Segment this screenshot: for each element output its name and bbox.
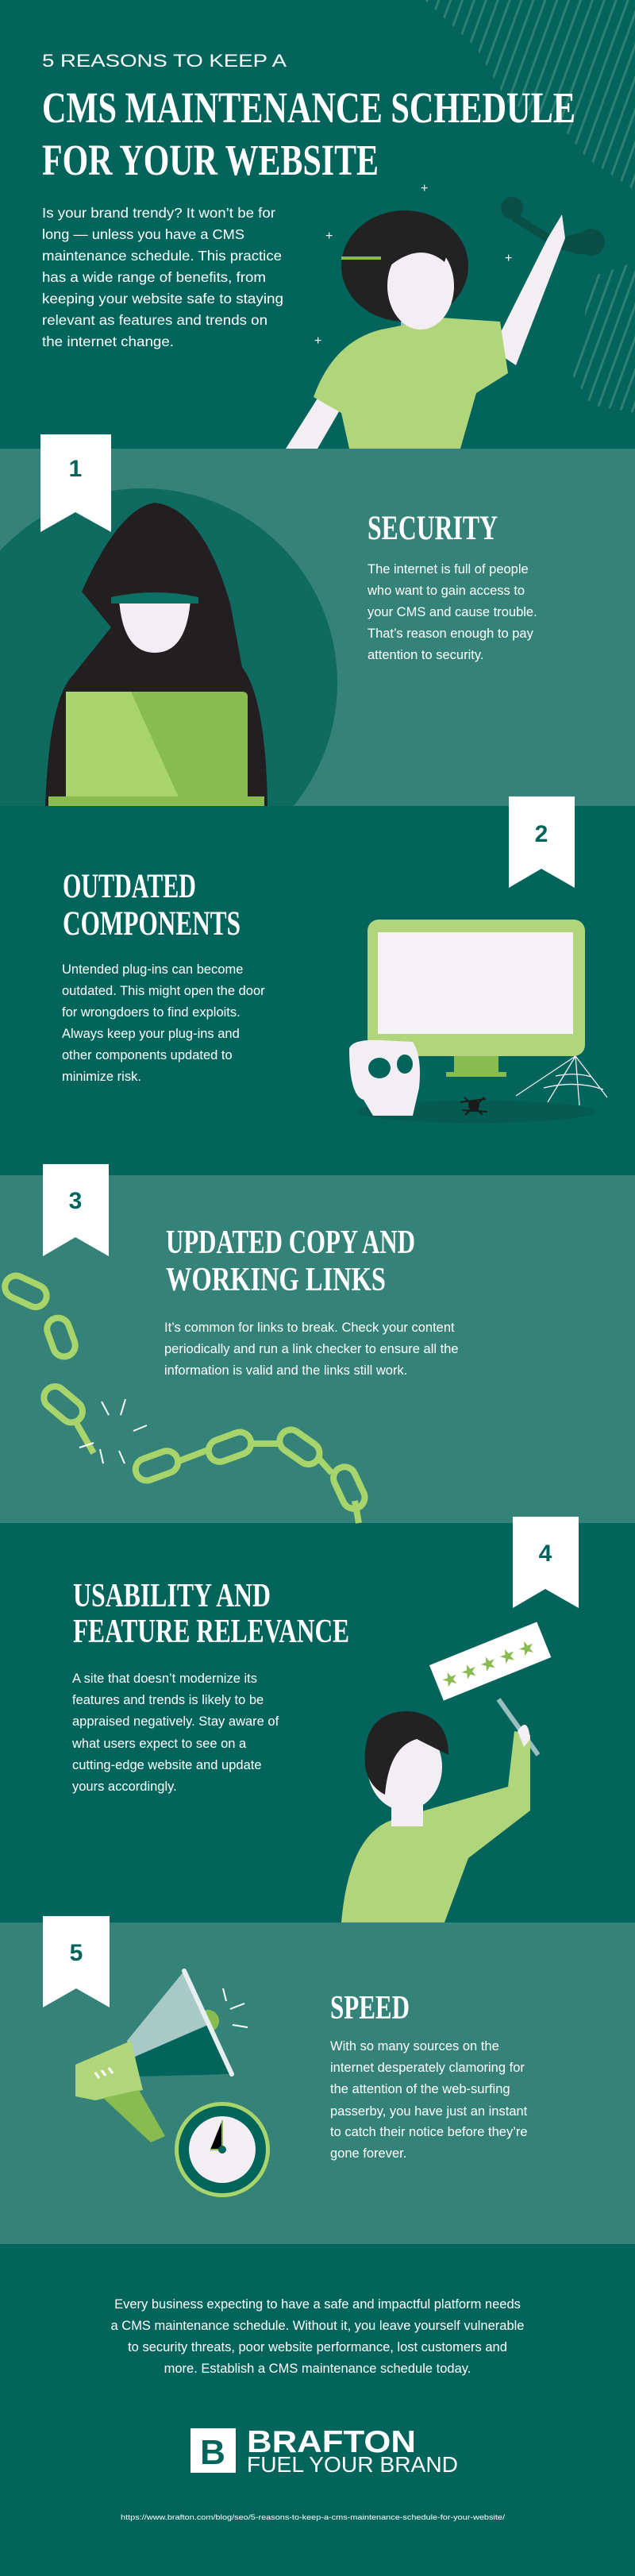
- text: security: The internet is full of people: [368, 562, 529, 577]
- heading: outdated components: OUTDATED: [63, 868, 196, 905]
- text: links: information is valid and the links still work.: [164, 1363, 407, 1378]
- ribbon 2: 2: [535, 821, 548, 847]
- icon: hacker: [45, 503, 267, 806]
- hacker circle: [0, 488, 337, 806]
- ribbon 4: 4: [539, 1541, 552, 1567]
- heading: security: SECURITY: [368, 510, 498, 547]
- text: usability: features and trends is likely to be: [72, 1693, 264, 1707]
- ribbon 5: 5: [70, 1940, 83, 1966]
- source url: https://www.brafton.com/blog/seo/5-reasons-to-keep-a-cms-maintenance-schedule-for-your-website/: [121, 2513, 505, 2522]
- text: outdated: other components updated to: [62, 1048, 233, 1062]
- icon: woman with rating sign: ★: [438, 1666, 462, 1693]
- intro text: Is your brand trendy? It won’t be for: [42, 205, 275, 221]
- text: security: who want to gain access to: [367, 584, 525, 598]
- ribbon 3: [43, 1164, 109, 1256]
- footer text: to security threats, poor website performance, lost customers and: [128, 2340, 507, 2354]
- text: usability: appraised negatively. Stay aware of: [72, 1714, 279, 1729]
- text: speed: to catch their notice before they’re: [330, 2125, 528, 2139]
- ribbon 5: [43, 1916, 110, 2007]
- intro text: the internet change.: [42, 334, 174, 349]
- text: outdated: minimize risk.: [62, 1070, 141, 1084]
- icon: woman with rating sign: ★: [495, 1642, 520, 1669]
- heading: updated copy: [166, 1224, 415, 1298]
- illustration: woman with wrench: +: [314, 334, 321, 348]
- illustration: woman with wrench: +: [447, 228, 454, 241]
- text: usability: cutting-edge website and update: [72, 1758, 262, 1772]
- footer text: Every business expecting to have a safe and impactful platform needs: [114, 2297, 521, 2312]
- heading: outdated components: [63, 868, 241, 943]
- icon: clock: [175, 2102, 270, 2197]
- panel 3: updated copy: [0, 1164, 635, 1523]
- icon: woman with rating sign: [341, 1622, 551, 1922]
- header stripes decoration: [425, 0, 635, 413]
- text: links: It’s common for links to break. Check your content: [164, 1321, 455, 1335]
- logo: brafton: [190, 2425, 458, 2477]
- title: FOR YOUR WEBSITE: [42, 136, 379, 184]
- text: outdated: outdated. This might open the door: [62, 984, 265, 998]
- text: security: your CMS and cause trouble.: [368, 605, 537, 619]
- text: outdated: for wrongdoers to find exploits.: [62, 1005, 241, 1020]
- panel 2: outdated components: [62, 796, 607, 1123]
- icon: broken chain: [2, 1272, 368, 1523]
- text: speed: passerby, you have just an instant: [330, 2104, 528, 2119]
- illustration: woman with wrench: +: [421, 182, 428, 195]
- ribbon 1: [40, 434, 111, 532]
- heading: usability: [73, 1578, 349, 1650]
- heading: updated copy: WORKING LINKS: [166, 1262, 386, 1298]
- illustration: woman with wrench: +: [325, 229, 333, 243]
- ribbon 1: 1: [69, 456, 82, 482]
- text: outdated: Untended plug-ins can become: [62, 962, 243, 977]
- illustration: woman with wrench: [286, 182, 605, 449]
- ribbon 2: [509, 796, 575, 888]
- heading: usability: USABILITY AND: [73, 1578, 271, 1614]
- icon: woman with rating sign: ★: [457, 1658, 481, 1685]
- icon: monitor, skull, spider: [349, 920, 607, 1123]
- text: usability: what users expect to see on a: [71, 1737, 247, 1751]
- text: usability: yours accordingly.: [72, 1780, 177, 1794]
- title: [42, 83, 575, 184]
- text: usability: A site that doesn’t modernize its: [72, 1672, 257, 1686]
- intro text: keeping your website safe to staying: [42, 291, 283, 307]
- text: links: periodically and run a link checker to ensure all the: [164, 1342, 459, 1356]
- icon: woman with rating sign: ★: [514, 1635, 539, 1662]
- footer text: a CMS maintenance schedule. Without it, you leave yourself vulnerable: [111, 2319, 524, 2333]
- intro text: long — unless you have a CMS: [42, 226, 244, 242]
- text: speed: the attention of the web-surfing: [330, 2082, 510, 2096]
- subtitle: 5 REASONS TO KEEP A: [42, 51, 287, 71]
- icon: megaphone: [75, 1971, 248, 2142]
- logo: brafton: BRAFTON: [247, 2425, 416, 2459]
- intro text: relevant as features and trends on: [42, 312, 267, 328]
- intro text: has a wide range of benefits, from: [42, 269, 266, 285]
- logo: brafton: FUEL YOUR BRAND: [247, 2452, 458, 2477]
- logo: brafton: B: [200, 2433, 225, 2472]
- text: speed: internet desperately clamoring for: [330, 2061, 525, 2075]
- text: outdated: Always keep your plug-ins and: [62, 1027, 240, 1041]
- heading: speed: SPEED: [330, 1990, 410, 2026]
- ribbon 3: 3: [69, 1188, 82, 1214]
- heading: usability: FEATURE RELEVANCE: [73, 1614, 349, 1650]
- ribbon 4: [513, 1517, 579, 1608]
- heading: updated copy: UPDATED COPY AND: [166, 1224, 415, 1261]
- text: security: attention to security.: [368, 648, 483, 662]
- panel 1: security: [0, 434, 635, 806]
- text: security: That’s reason enough to pay: [368, 627, 534, 641]
- footer text: more. Establish a CMS maintenance schedule today.: [164, 2362, 471, 2376]
- heading: outdated components: COMPONENTS: [63, 905, 241, 943]
- intro text: maintenance schedule. This practice: [42, 248, 282, 264]
- text: speed: With so many sources on the: [330, 2039, 499, 2053]
- text: speed: gone forever.: [330, 2146, 406, 2161]
- panel 5: speed: [0, 1916, 635, 2244]
- icon: woman with rating sign: ★: [476, 1650, 501, 1677]
- panel 4: usability: [71, 1517, 579, 1922]
- illustration: woman with wrench: +: [505, 252, 512, 265]
